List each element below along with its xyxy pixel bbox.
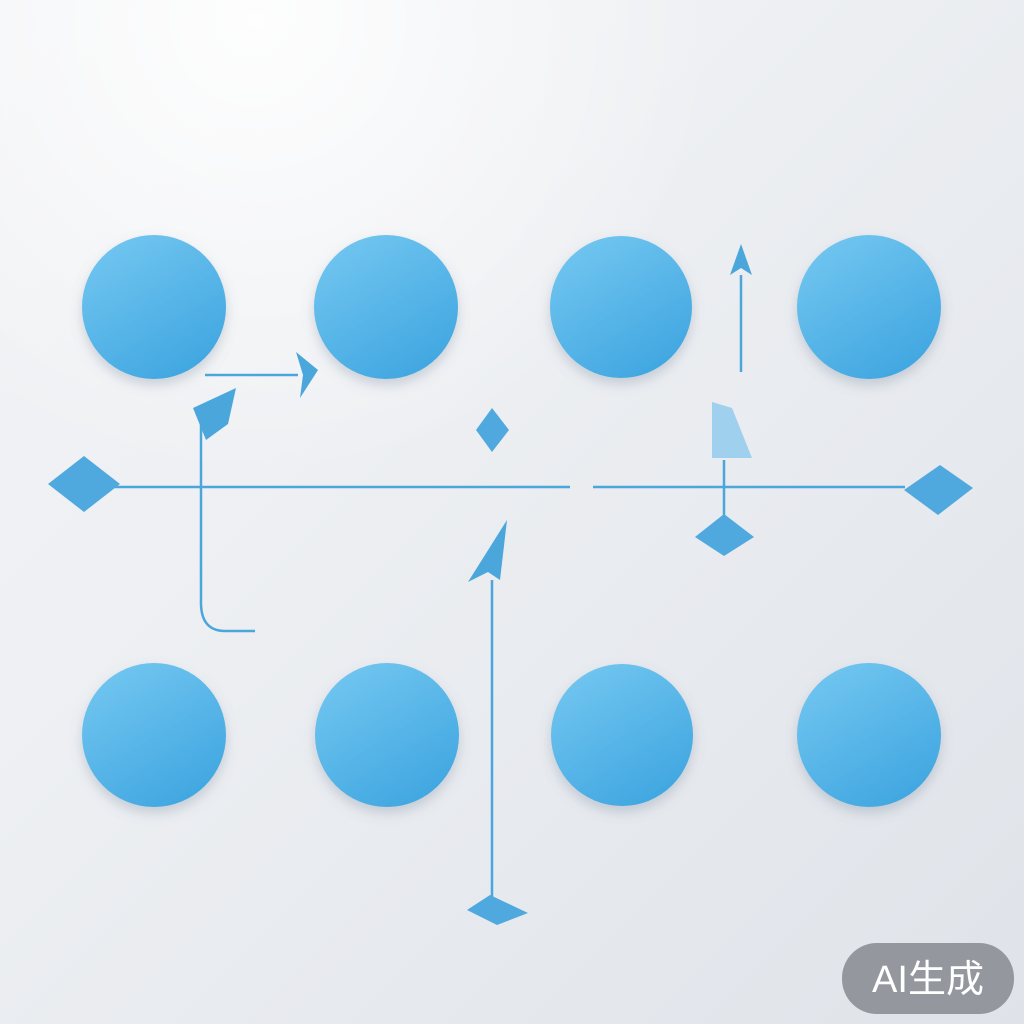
arrows bbox=[193, 244, 752, 582]
badge bbox=[842, 943, 1014, 1014]
connector lines bbox=[110, 275, 905, 900]
circles bottom row bbox=[82, 663, 941, 807]
circles top row bbox=[82, 235, 941, 379]
badge: AI生成 bbox=[872, 959, 984, 1001]
diamonds bbox=[48, 408, 973, 925]
